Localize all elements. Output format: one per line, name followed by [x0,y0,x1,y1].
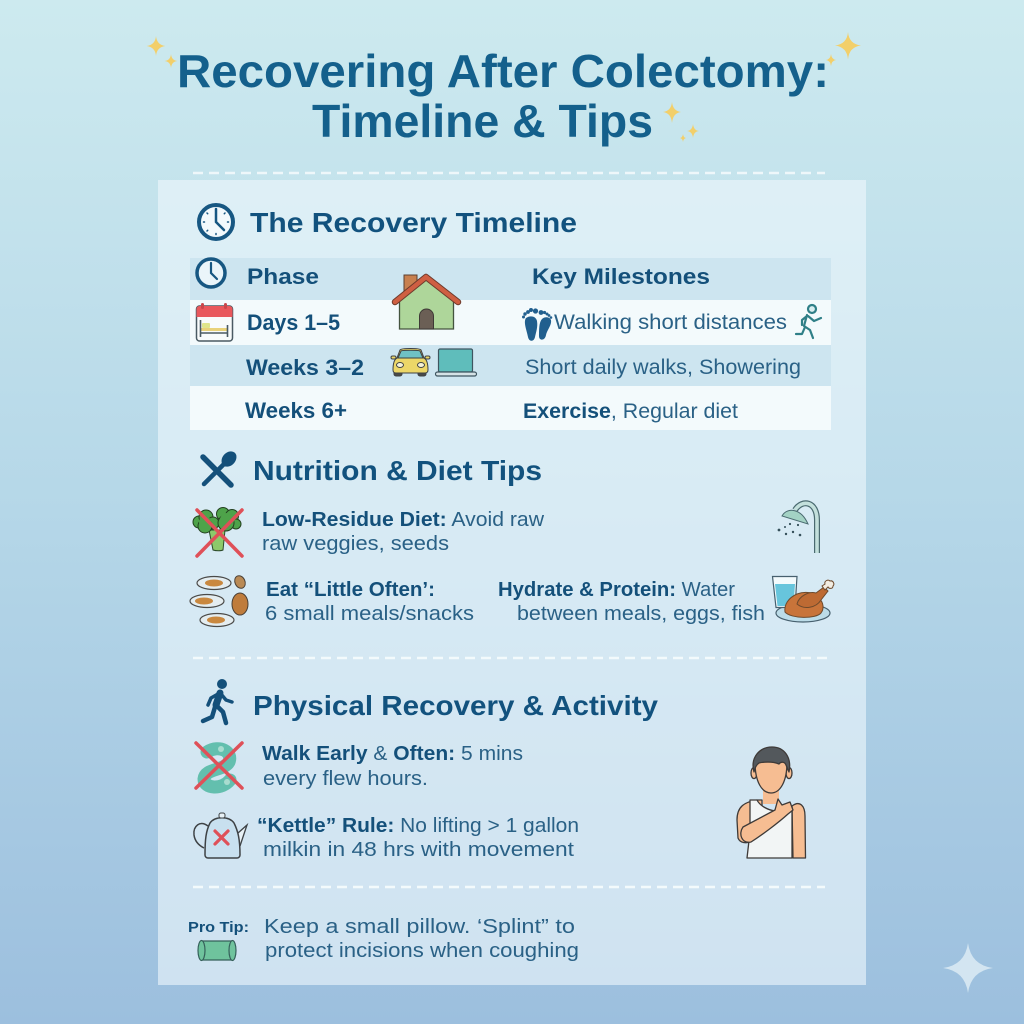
tip: eat little often: Eat “Little Often’: [266,579,435,601]
row: weeks 6+: Weeks 6+ [245,398,347,423]
tip: walk early and often [262,743,523,790]
icon: house [395,275,458,329]
icon: gold sparkles [146,32,861,142]
row: days 1-5: Walking short distances [554,311,787,334]
panel: physical recovery and activity [194,679,805,861]
row: weeks 6+: Exercise, Regular diet [523,400,738,423]
heading: Nutrition & Diet Tips [203,448,542,486]
title [177,45,829,147]
tip: low-residue diet: raw veggies, seeds [262,533,449,555]
row: days 1-5 [247,310,787,335]
tip: low-residue diet [262,509,545,555]
tip: low-residue diet: Low-Residue Diet: Avoid raw [262,509,545,531]
row: weeks 3-2: Weeks 3–2 [246,355,364,380]
table header: Phase [247,264,319,289]
icon: small clock [197,259,225,287]
icon: footprints [522,308,552,341]
tip: splint text: protect incisions when coughing [265,940,579,962]
tip: hydrate and protein: Hydrate & Protein: Water [498,579,735,601]
tip: walk early and often: every flew hours. [263,768,428,790]
row: weeks 3-2 [246,355,801,380]
row: weeks 6+ [245,398,738,423]
tip: kettle rule: “Kettle” Rule: No lifting > 1 gallon [257,815,579,837]
title: Timeline & Tips [312,95,653,147]
row: weeks 3-2: Short daily walks, Showering [525,356,801,379]
panel: main content card [158,180,866,985]
panel: nutrition and diet tips [190,448,834,626]
tip: kettle rule [257,815,579,861]
icon: person holding shoulder [737,747,806,858]
heading: Physical Recovery & Activity [203,679,658,723]
table header: Key Milestones [532,264,710,289]
icon: shower [778,503,817,553]
icon: crossed intestine [196,743,242,788]
icon: pillow [198,940,236,960]
icon: kettle with cross [194,813,247,858]
icon: laptop [436,349,476,376]
row: days 1-5: Days 1–5 [247,310,340,335]
tip: splint text [264,916,579,962]
tip: kettle rule: milkin in 48 hrs with movement [263,839,574,861]
icon: runner [796,305,821,338]
icon: water glass and turkey [772,576,834,622]
tip: walk early and often: Walk Early & Often: 5 mins [262,743,523,765]
icon: car [391,348,430,376]
panel: recovery timeline [190,205,831,430]
tip: hydrate and protein [498,579,765,625]
panel: pro tip [188,916,579,962]
tip: hydrate and protein: between meals, eggs, fish [517,603,765,625]
heading: The Recovery Timeline: The Recovery Timeline [250,207,577,238]
heading: Physical Recovery & Activity: Physical Recovery & Activity [253,690,658,721]
icon: plates and nuts [190,574,248,626]
tip: eat little often: 6 small meals/snacks [265,603,474,625]
tip: splint text: Keep a small pillow. ‘Splint” to [264,916,575,938]
tip: eat little often [265,579,474,625]
icon: white star bottom right [943,943,993,993]
icon: crossed broccoli [193,508,242,556]
icon: calendar with bed [196,303,232,341]
label: Pro Tip: Pro Tip: [188,919,249,936]
table: phases and milestones [190,258,831,430]
heading: Nutrition & Diet Tips: Nutrition & Diet Tips [253,455,542,486]
table header [247,264,710,289]
title: Recovering After Colectomy: [177,45,829,97]
